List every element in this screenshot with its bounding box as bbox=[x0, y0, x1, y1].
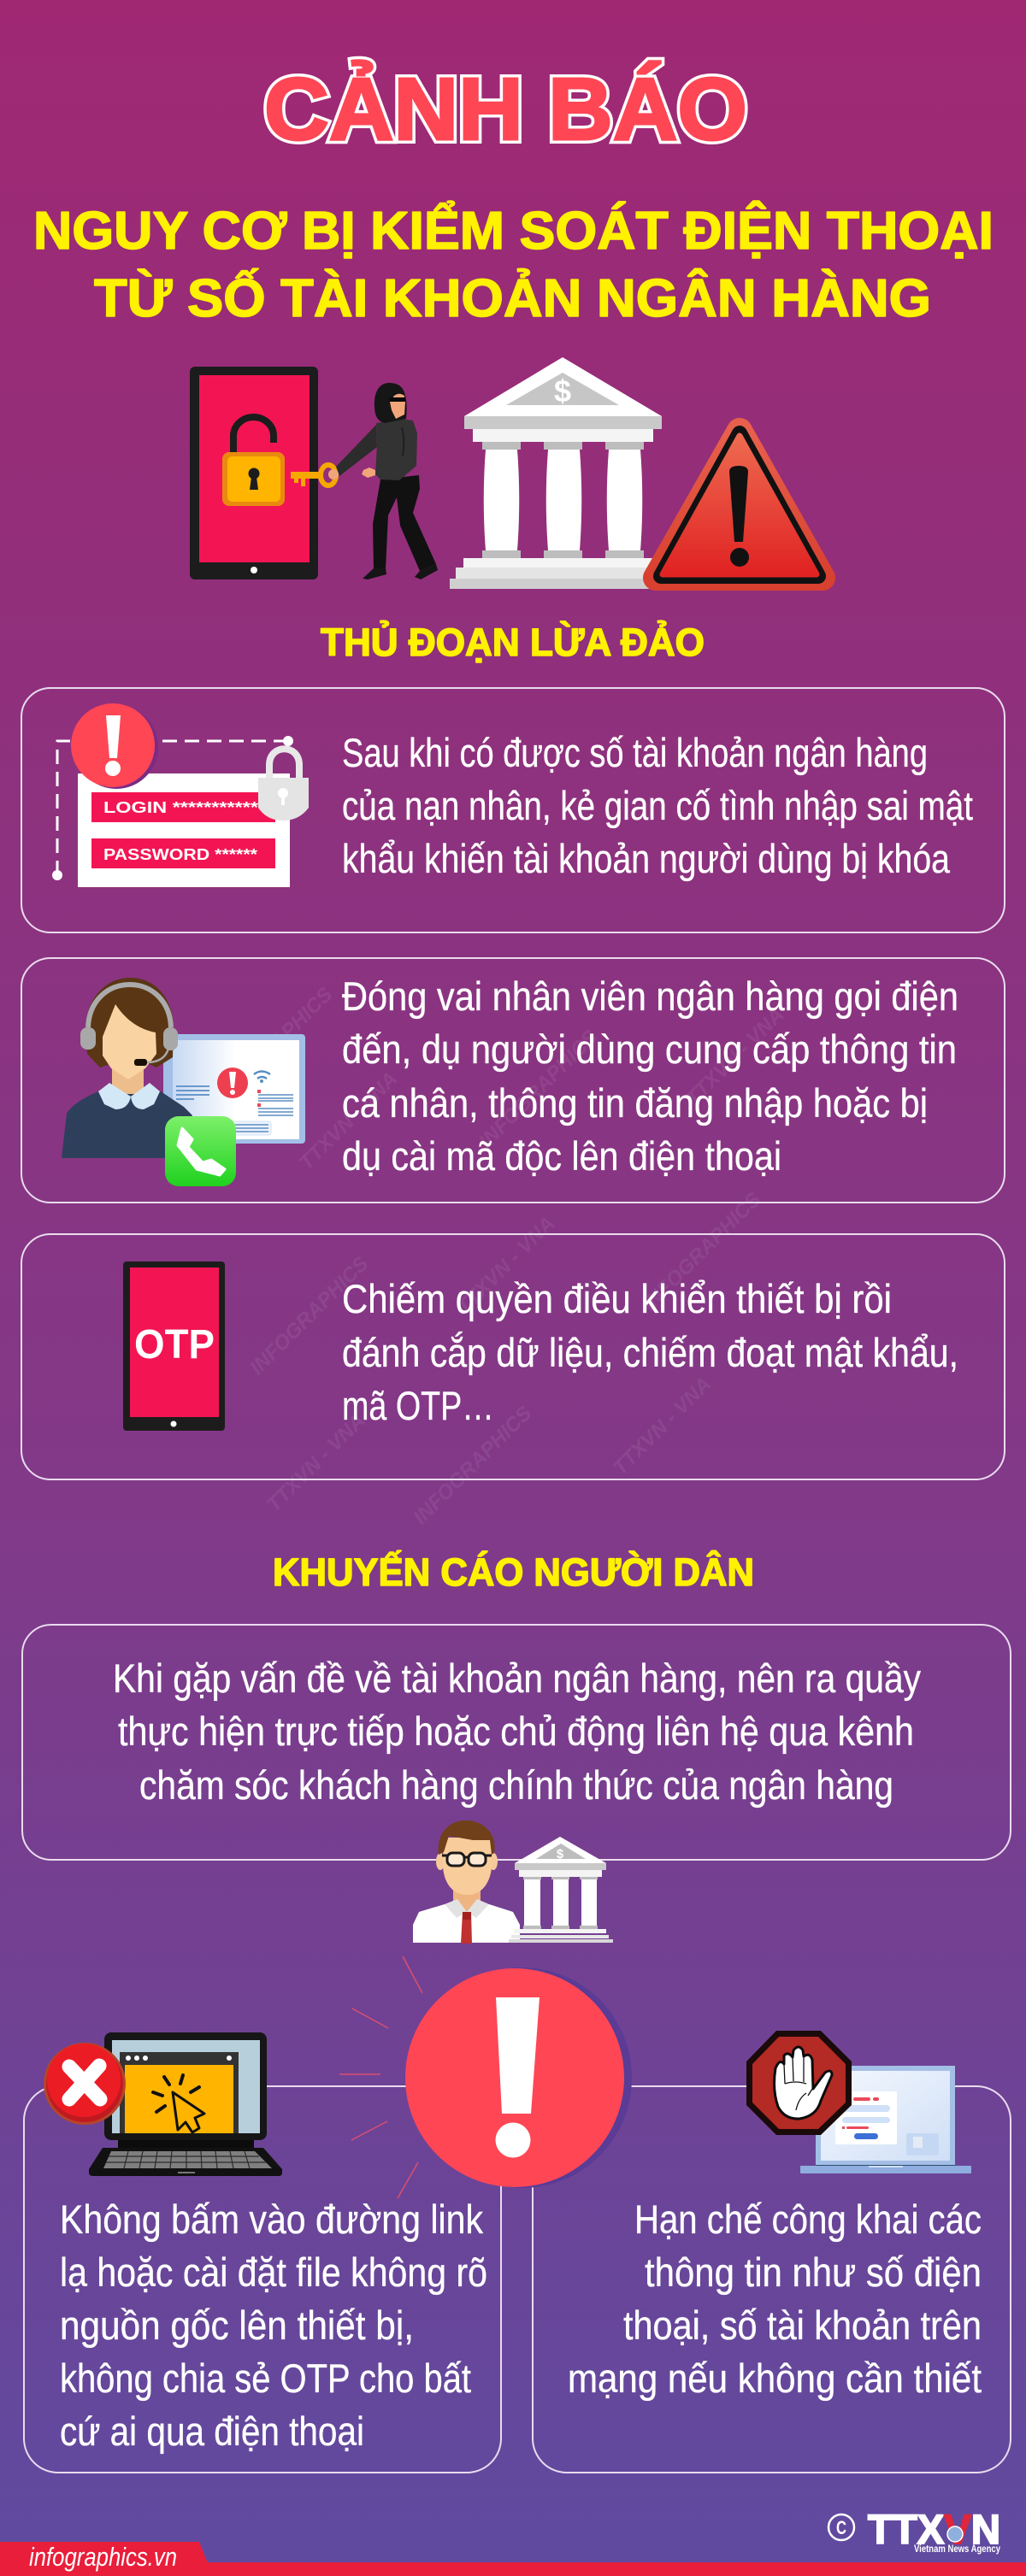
watermarks: TTXVN - VNA bbox=[295, 1067, 403, 1175]
text: advice right: mạng nếu không cần thiết bbox=[568, 2355, 982, 2401]
text: advice left: cứ ai qua điện thoại bbox=[60, 2408, 364, 2454]
logo: TTXVN: TTXVN bbox=[868, 2508, 1000, 2553]
text: advice right bbox=[568, 2197, 982, 2401]
icon: login form alert: PASSWORD ****** bbox=[103, 846, 257, 863]
icon: small bank bbox=[509, 1837, 613, 1943]
text: advice right: thoại, số tài khoản trên bbox=[623, 2303, 982, 2348]
text: tactic 2: cá nhân, thông tin đăng nhập hoặc bị bbox=[342, 1080, 928, 1126]
heading: subtitle bbox=[33, 202, 994, 328]
panel: tactic 3 bbox=[21, 1234, 1005, 1479]
icon: OTP phone: OTP bbox=[134, 1322, 215, 1367]
text: tactic 3: mã OTP… bbox=[342, 1383, 494, 1428]
watermarks: TTXVN - VNA bbox=[452, 1212, 560, 1320]
watermarks: TTXVN - VNA bbox=[609, 1373, 716, 1480]
text: tactic 3 bbox=[342, 1276, 958, 1428]
text: advice left: lạ hoặc cài đặt file không rõ bbox=[60, 2250, 487, 2295]
watermarks: INFOGRAPHICS bbox=[638, 1188, 765, 1315]
icon: small bank: $ bbox=[557, 1847, 564, 1861]
text: advice left: không chia sẻ OTP cho bất bbox=[60, 2355, 471, 2401]
text: tactic 3: Chiếm quyền điều khiển thiết bị rồi bbox=[342, 1276, 892, 1321]
text: tactic 1 bbox=[342, 730, 973, 881]
text: tactic 2: dụ cài mã độc lên điện thoại bbox=[342, 1133, 781, 1179]
icon: monitor with form bbox=[800, 2066, 971, 2173]
watermarks: INFOGRAPHICS bbox=[409, 1402, 536, 1529]
icon: burst rays bbox=[339, 1956, 422, 2198]
text: main recommendation: chăm sóc khách hàng chính thức của ngân hàng bbox=[139, 1762, 893, 1808]
watermarks: INFOGRAPHICS bbox=[475, 1026, 602, 1153]
watermarks: TTXVN - VNA bbox=[681, 1003, 789, 1111]
text: tactic 2 bbox=[342, 973, 958, 1179]
icon: stop sign hand bbox=[746, 2031, 852, 2135]
panel: advice right bbox=[533, 2086, 1011, 2473]
watermarks bbox=[209, 983, 789, 1529]
text: tactic 2: đến, dụ người dùng cung cấp thông tin bbox=[342, 1026, 957, 1072]
icon: login form alert: LOGIN *********** bbox=[103, 799, 258, 816]
text: main recommendation bbox=[113, 1656, 921, 1808]
title: warning: CẢNH BÁO bbox=[264, 60, 747, 158]
icon: laptop with X mark bbox=[44, 2032, 282, 2176]
title: warning: CẢNH BÁO bbox=[264, 60, 747, 158]
panel: main recommendation bbox=[22, 1625, 1011, 1860]
icon: bank bbox=[450, 357, 663, 589]
watermarks: INFOGRAPHICS bbox=[209, 983, 337, 1110]
footer: source tab bbox=[0, 2542, 1026, 2576]
heading: subtitle: NGUY CƠ BỊ KIỂM SOÁT ĐIỆN THOẠI bbox=[33, 202, 994, 261]
watermarks: INFOGRAPHICS bbox=[245, 1252, 373, 1379]
watermarks: TTXVN - VNA bbox=[262, 1409, 370, 1517]
heading: recommendations: KHUYẾN CÁO NGƯỜI DÂN bbox=[273, 1550, 754, 1594]
panel: advice left bbox=[24, 2086, 501, 2473]
panel: tactic 2 bbox=[21, 958, 1005, 1203]
icon: hacker bbox=[328, 383, 438, 579]
text: main recommendation: Khi gặp vấn đề về tài khoản ngân hàng, nên ra quầy bbox=[113, 1656, 921, 1701]
text: main recommendation: thực hiện trực tiếp hoặc chủ động liên hệ qua kênh bbox=[118, 1709, 914, 1754]
icon: big alert circle bbox=[405, 1967, 632, 2188]
text: infographics.vn: infographics.vn bbox=[29, 2542, 177, 2572]
icon: phone with open lock bbox=[190, 367, 318, 579]
heading: subtitle: TỪ SỐ TÀI KHOẢN NGÂN HÀNG bbox=[94, 269, 931, 328]
icon: key bbox=[291, 465, 336, 486]
icon: bank employee bbox=[413, 1820, 520, 1944]
icon: login form alert bbox=[52, 703, 309, 887]
text: tactic 2: Đóng vai nhân viên ngân hàng gọi điện bbox=[342, 973, 958, 1019]
icon: warning triangle bbox=[656, 431, 823, 578]
heading: scam tactics: THỦ ĐOẠN LỪA ĐẢO bbox=[321, 620, 705, 664]
icon: OTP phone bbox=[123, 1262, 225, 1431]
panel: tactic 1 bbox=[21, 688, 1005, 932]
text: advice left bbox=[60, 2197, 487, 2454]
text: advice left: Không bấm vào đường link bbox=[60, 2197, 483, 2242]
text: advice right: thông tin như số điện bbox=[645, 2250, 982, 2295]
logo: TTXVN: Vietnam News Agency bbox=[914, 2543, 1000, 2555]
icon: bank: $ bbox=[554, 373, 571, 409]
logo: TTXVN: C bbox=[836, 2517, 846, 2538]
text: advice left: nguồn gốc lên thiết bị, bbox=[60, 2303, 414, 2348]
icon: call-center woman with monitor and phone bbox=[62, 978, 305, 1186]
